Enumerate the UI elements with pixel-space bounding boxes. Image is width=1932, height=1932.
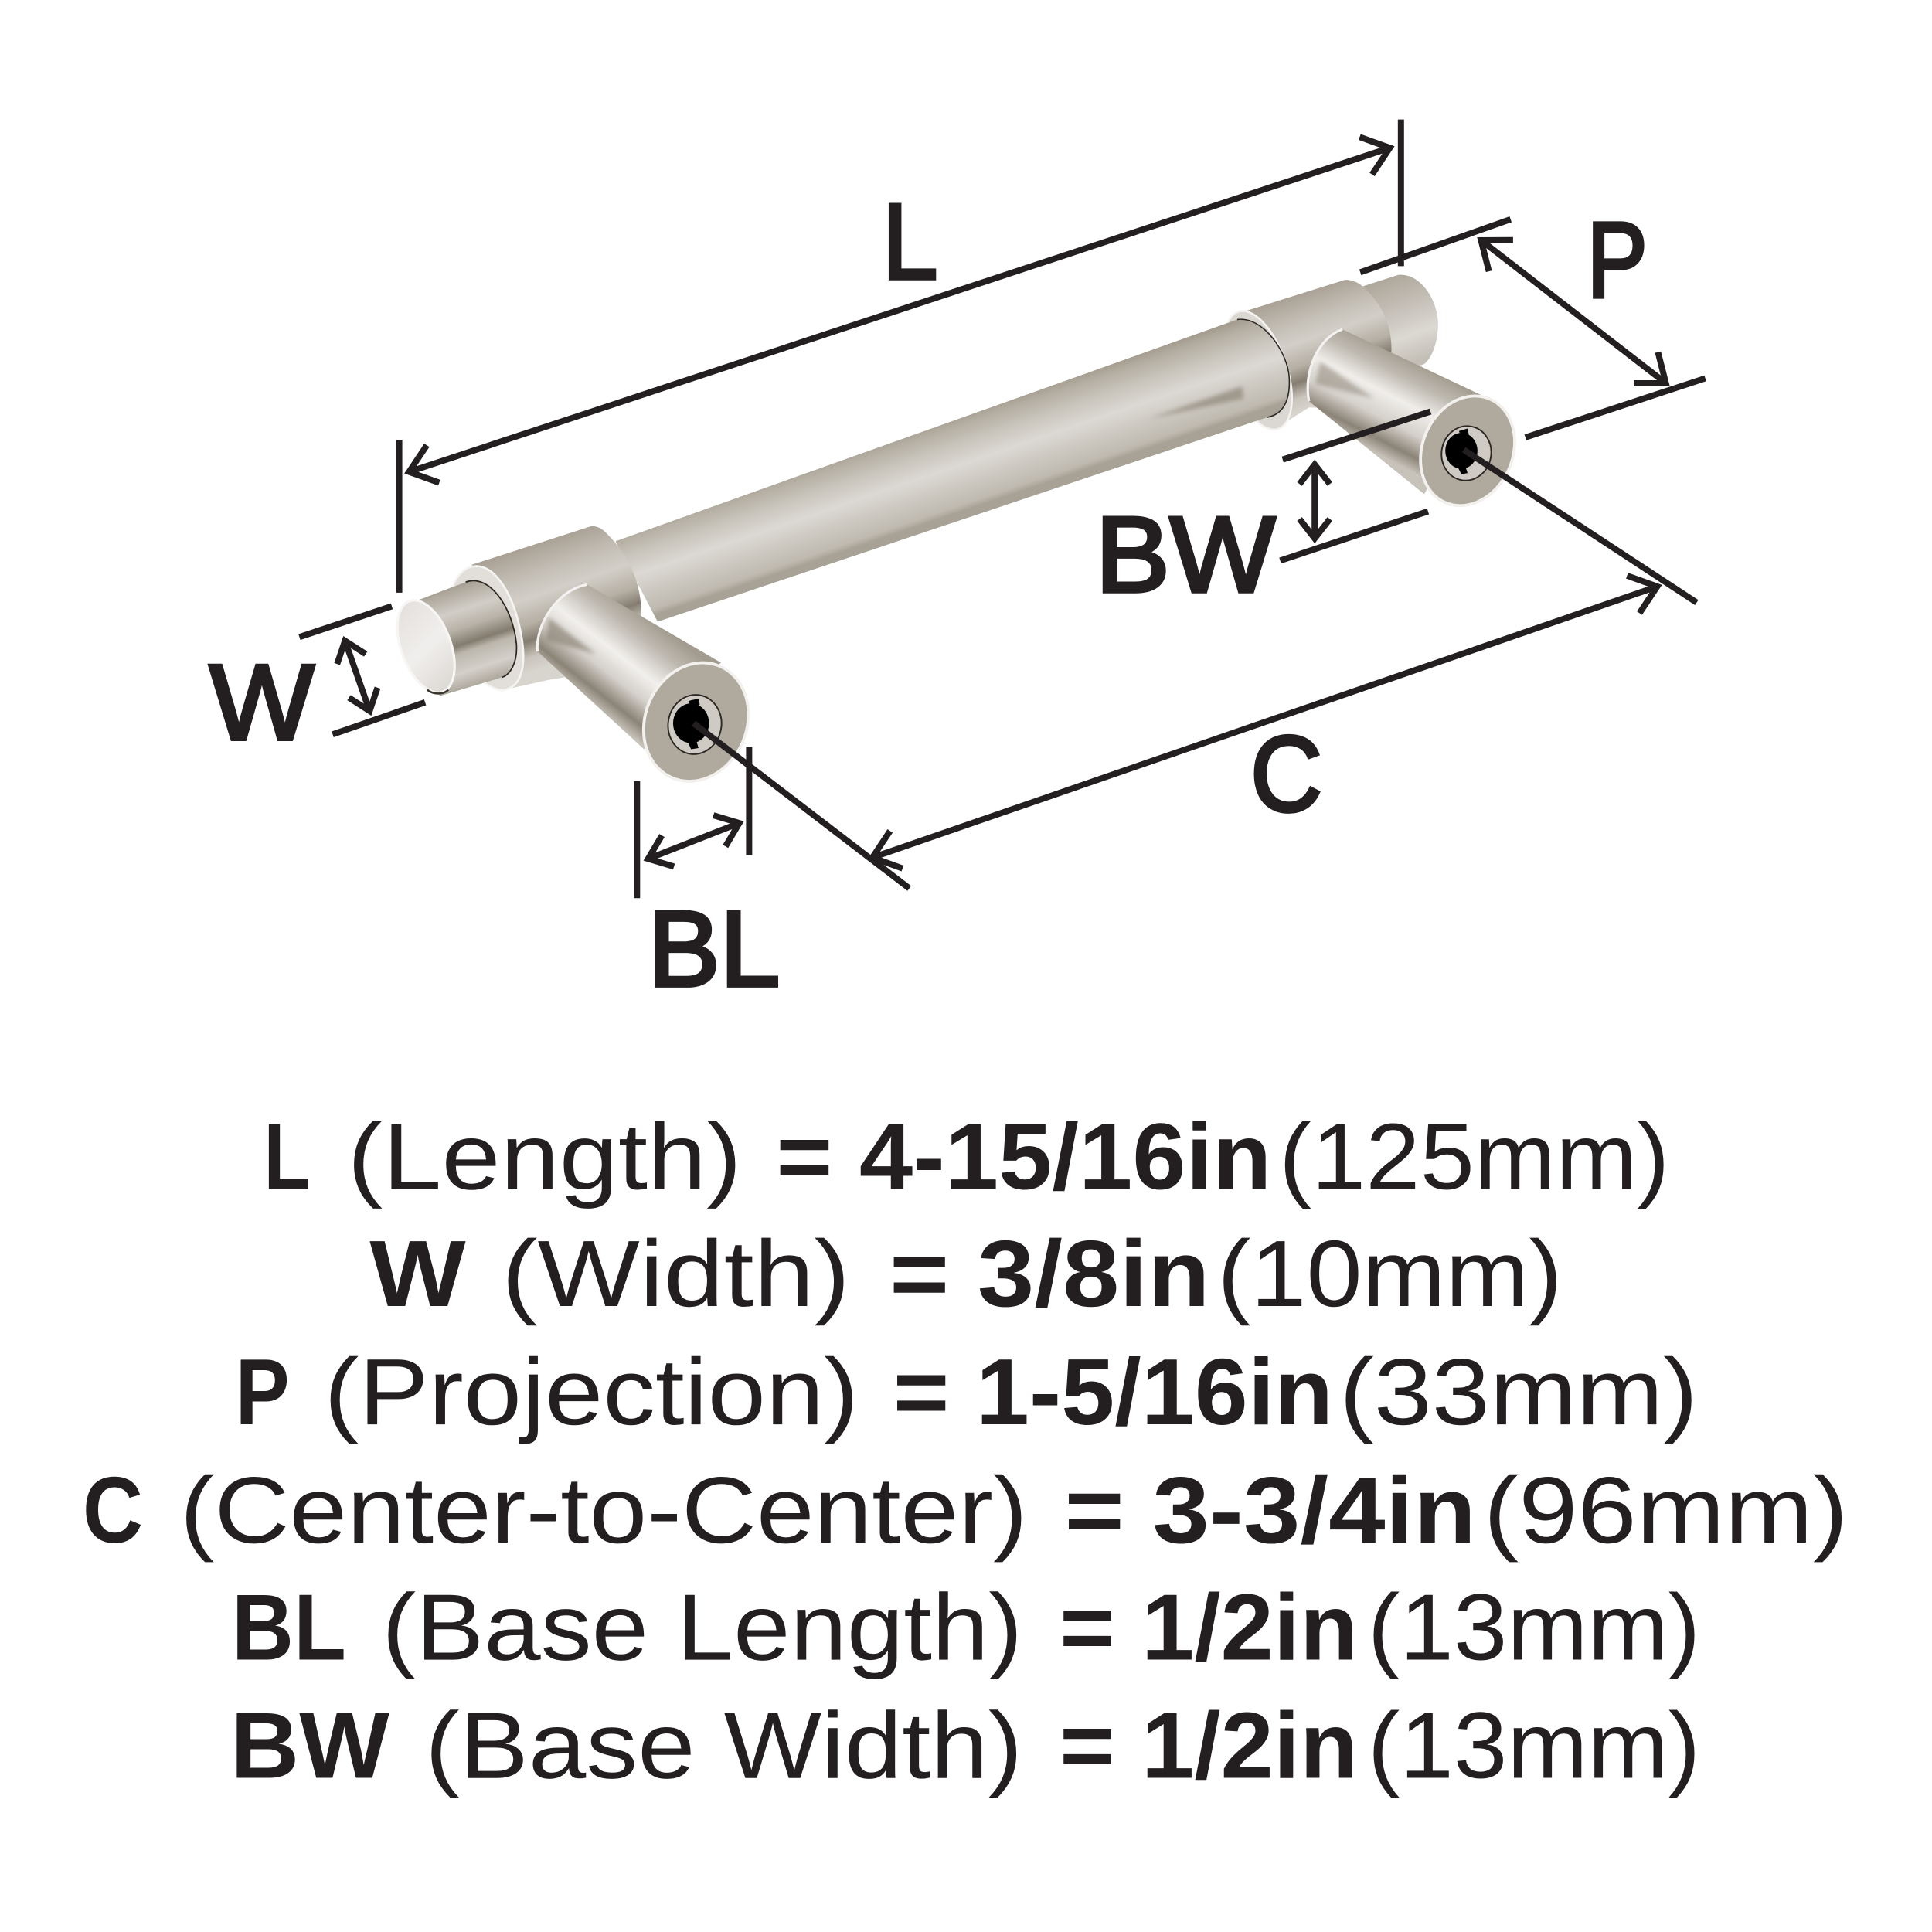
spec line: base length: BL xyxy=(232,1575,346,1680)
spec line: width: = 3/8in xyxy=(889,1221,1210,1326)
spec line: width: (Width) xyxy=(502,1221,850,1326)
spec line: center-to-center: = 3-3/4in xyxy=(1065,1458,1476,1563)
spec line: projection: = 1-5/16in xyxy=(893,1339,1333,1444)
spec line: width xyxy=(369,1221,1563,1326)
spec line: base length: (13mm) xyxy=(1368,1575,1700,1680)
left stub xyxy=(413,580,516,696)
right collar xyxy=(1242,280,1392,428)
bar shadow glint xyxy=(1149,386,1243,419)
label W: W xyxy=(209,643,315,763)
dimension BW lines and arrow xyxy=(1281,412,1430,560)
spec line: length: L xyxy=(264,1104,311,1209)
spec line: projection xyxy=(236,1339,1698,1444)
label BW: BW xyxy=(1095,495,1275,614)
label BL: BL xyxy=(648,889,780,1009)
spec line: center-to-center: (96mm) xyxy=(1484,1458,1849,1563)
left flange xyxy=(449,566,523,690)
right post base xyxy=(1404,381,1531,520)
spec line: base length: = 1/2in xyxy=(1060,1575,1358,1680)
label L: L xyxy=(883,182,937,301)
spec line: length: (Length) xyxy=(348,1104,742,1209)
cabinet pull handle xyxy=(386,275,1531,798)
spec line: width: W xyxy=(369,1221,466,1326)
spec line: length: = 4-15/16in xyxy=(776,1104,1271,1209)
dimension P lines and arrow xyxy=(1360,219,1706,437)
right bar root ring xyxy=(1237,319,1289,417)
left stub front xyxy=(413,580,516,696)
spec line: base length xyxy=(232,1575,1700,1680)
spec line: center-to-center xyxy=(83,1458,1849,1563)
spec line: base width: (13mm) xyxy=(1368,1693,1700,1798)
left stub root ring xyxy=(466,580,516,678)
main bar xyxy=(615,319,1289,621)
label C: C xyxy=(1250,714,1322,834)
spec line: center-to-center: C xyxy=(83,1458,143,1563)
spec line: base width: BW xyxy=(230,1693,389,1798)
spec line: length: (125mm) xyxy=(1279,1104,1669,1209)
right end stub xyxy=(1360,275,1438,376)
left end cap face xyxy=(386,593,466,700)
spec line: base width: = 1/2in xyxy=(1060,1693,1358,1798)
spec line: projection: P xyxy=(236,1339,290,1444)
left post base xyxy=(625,646,767,798)
spec line: center-to-center: (Center-to-Center) xyxy=(180,1458,1028,1563)
right post xyxy=(1308,329,1481,494)
dimension BL lines and arrow xyxy=(637,747,749,898)
spec line: base length: (Base Length) xyxy=(382,1575,1022,1680)
left post xyxy=(537,584,721,750)
dimension W lines and arrow xyxy=(299,606,425,734)
spec line: projection: (33mm) xyxy=(1339,1339,1698,1444)
label P: P xyxy=(1587,200,1648,320)
dimension L lines and arrow xyxy=(400,120,1401,593)
spec line: base width xyxy=(230,1693,1700,1798)
spec line: base width: (Base Width) xyxy=(425,1693,1022,1798)
right flange xyxy=(1211,302,1305,438)
left collar xyxy=(472,526,641,690)
spec line: length xyxy=(264,1104,1669,1209)
spec line: projection: (Projection) xyxy=(324,1339,859,1444)
dimension C lines and arrow xyxy=(694,450,1696,889)
spec line: width: (10mm) xyxy=(1217,1221,1563,1326)
